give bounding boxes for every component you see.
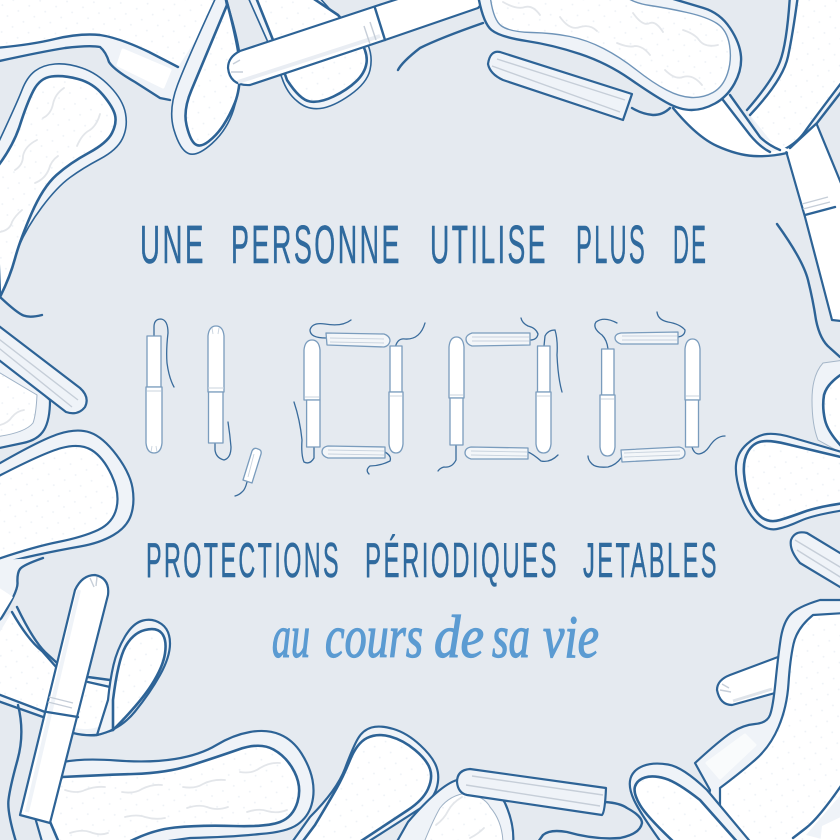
subheading: script line: de — [434, 604, 484, 670]
tampon: lower left — [20, 575, 108, 823]
string — [632, 108, 670, 115]
string: bottom left — [8, 705, 21, 840]
tampon: bottom with string — [457, 769, 642, 840]
pad: behind lower-left tampon — [0, 607, 113, 735]
heading: line 1 — [140, 215, 708, 275]
pad: small oval lower-left — [97, 620, 170, 735]
tampon: top with applicator — [228, 0, 490, 85]
tampon: left — [0, 323, 87, 413]
digit: 0 — [438, 318, 562, 471]
heading: line 1: PERSONNE — [231, 215, 402, 275]
heading: line 1: UTILISE — [430, 215, 548, 275]
heading: line 1: UNE — [140, 215, 206, 275]
heading: line 2: PROTECTIONS — [146, 534, 341, 588]
pad: left wing fragment — [0, 558, 45, 628]
pad: bottom centre right — [395, 779, 513, 840]
pad: top right corner — [747, 0, 840, 150]
number 11,000 made of tampons — [146, 312, 725, 496]
pad: right upper circle — [812, 360, 840, 455]
subheading: script line: au — [272, 604, 310, 670]
heading: line 2: PÉRIODIQUES — [365, 534, 559, 588]
digit: 0 — [294, 320, 425, 474]
string — [398, 23, 483, 70]
pad: wing below top right — [673, 95, 790, 156]
pad: top-left strip with wing — [0, 0, 225, 100]
tampon: right behind lower pad — [717, 657, 785, 705]
subheading: script line — [272, 604, 599, 670]
text: DE — [673, 215, 708, 275]
pad: bottom large — [30, 731, 314, 840]
pad: right middle — [736, 434, 840, 529]
subheading: script line: sa — [492, 604, 530, 670]
subheading: script line: vie — [543, 604, 599, 670]
pad: bottom right large — [695, 600, 840, 840]
string — [0, 297, 42, 317]
subheading: script line: cours — [325, 604, 423, 670]
digit: 1 — [146, 319, 174, 453]
heading: line 1: PLUS — [576, 215, 647, 275]
pad: bottom right front — [630, 764, 753, 840]
digit: 0 — [588, 312, 725, 467]
string — [538, 802, 642, 840]
tampon: top right small — [488, 52, 670, 120]
pad: left behind tampon — [0, 350, 50, 449]
comma tampon — [235, 448, 261, 496]
lower right edge — [793, 780, 840, 838]
digit: 1 — [208, 326, 231, 460]
pad: top right large — [478, 0, 741, 110]
pad: behind top tampon — [247, 0, 371, 109]
string: right — [777, 224, 840, 357]
pad: upper-left large — [0, 64, 126, 317]
tampon: right small — [791, 532, 840, 590]
pad: oval top — [172, 0, 241, 154]
pad: bottom centre — [290, 727, 438, 840]
tampon: right vertical — [780, 120, 840, 322]
pad: left lower — [0, 431, 133, 566]
